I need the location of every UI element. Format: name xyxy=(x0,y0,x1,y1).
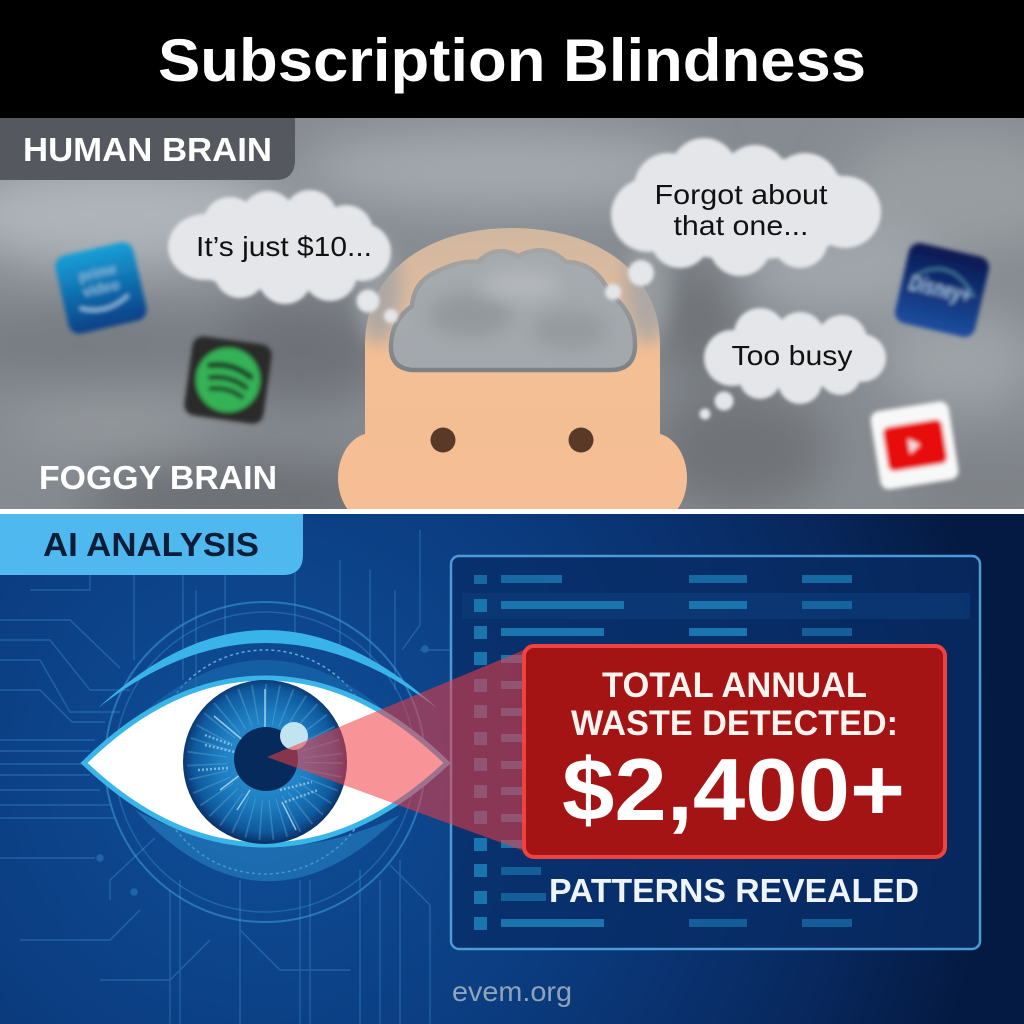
callout: total annual waste xyxy=(524,646,945,857)
table rows lower xyxy=(474,864,852,930)
thought bubble: forgot about that one: Forgot about xyxy=(654,179,828,210)
eye: left xyxy=(430,428,456,452)
data panel xyxy=(451,556,980,949)
table row 1 xyxy=(474,575,852,584)
source: evem.org: evem.org xyxy=(452,976,572,1007)
pupil xyxy=(234,727,298,791)
table row 3 xyxy=(474,626,852,639)
thought bubble: too busy xyxy=(700,308,886,420)
fog over head: left xyxy=(356,235,400,345)
icon: disney plus xyxy=(893,241,991,339)
ear: right xyxy=(660,434,687,509)
fog over head: right xyxy=(626,235,670,345)
red scan beam xyxy=(267,650,524,851)
head xyxy=(338,228,687,523)
callout: total annual waste: $2,400+ xyxy=(562,740,905,839)
thought bubble: forgot about that one: that one... xyxy=(674,210,808,241)
icon: youtube xyxy=(869,400,960,491)
eye white xyxy=(84,678,447,845)
ear: left xyxy=(338,434,365,509)
table row 2 xyxy=(474,599,852,612)
table rows behind callout xyxy=(474,652,525,851)
head shape xyxy=(365,228,660,509)
highlight xyxy=(280,722,308,750)
brow arc xyxy=(98,630,437,708)
eye graphic xyxy=(84,602,447,922)
thought bubble: too busy: Too busy xyxy=(732,340,852,371)
title bar xyxy=(0,0,1024,118)
tab: ai analysis xyxy=(0,514,303,575)
thought bubble: it's just $10: It’s just $10... xyxy=(196,231,372,262)
circuit background xyxy=(0,530,450,1024)
icon: spotify xyxy=(183,335,273,425)
brain: foggy cloud xyxy=(391,250,635,370)
title: Subscription Blindness xyxy=(158,27,866,94)
callout: total annual waste: WASTE DETECTED: xyxy=(571,704,898,743)
eye: right xyxy=(568,428,594,452)
icon: prime video: prime xyxy=(77,260,118,284)
tab: human brain xyxy=(0,118,295,180)
tab: ai analysis: AI ANALYSIS xyxy=(43,526,259,563)
iris xyxy=(183,680,347,844)
callout: total annual waste: TOTAL ANNUAL xyxy=(602,666,867,705)
icon: disney plus: Disney+ xyxy=(907,270,973,308)
panel: ai analysis xyxy=(0,514,1024,1024)
scanner rings xyxy=(105,602,425,922)
label: foggy brain: FOGGY BRAIN xyxy=(39,459,277,496)
patterns revealed: PATTERNS REVEALED xyxy=(549,872,919,909)
panel: human brain xyxy=(0,118,1024,540)
thought bubble: forgot about that one xyxy=(605,138,881,300)
icon: prime video: video xyxy=(81,276,121,300)
thought bubble: it's just $10 xyxy=(168,190,398,323)
icon: prime video xyxy=(53,240,149,336)
tab: human brain: HUMAN BRAIN xyxy=(23,131,272,168)
